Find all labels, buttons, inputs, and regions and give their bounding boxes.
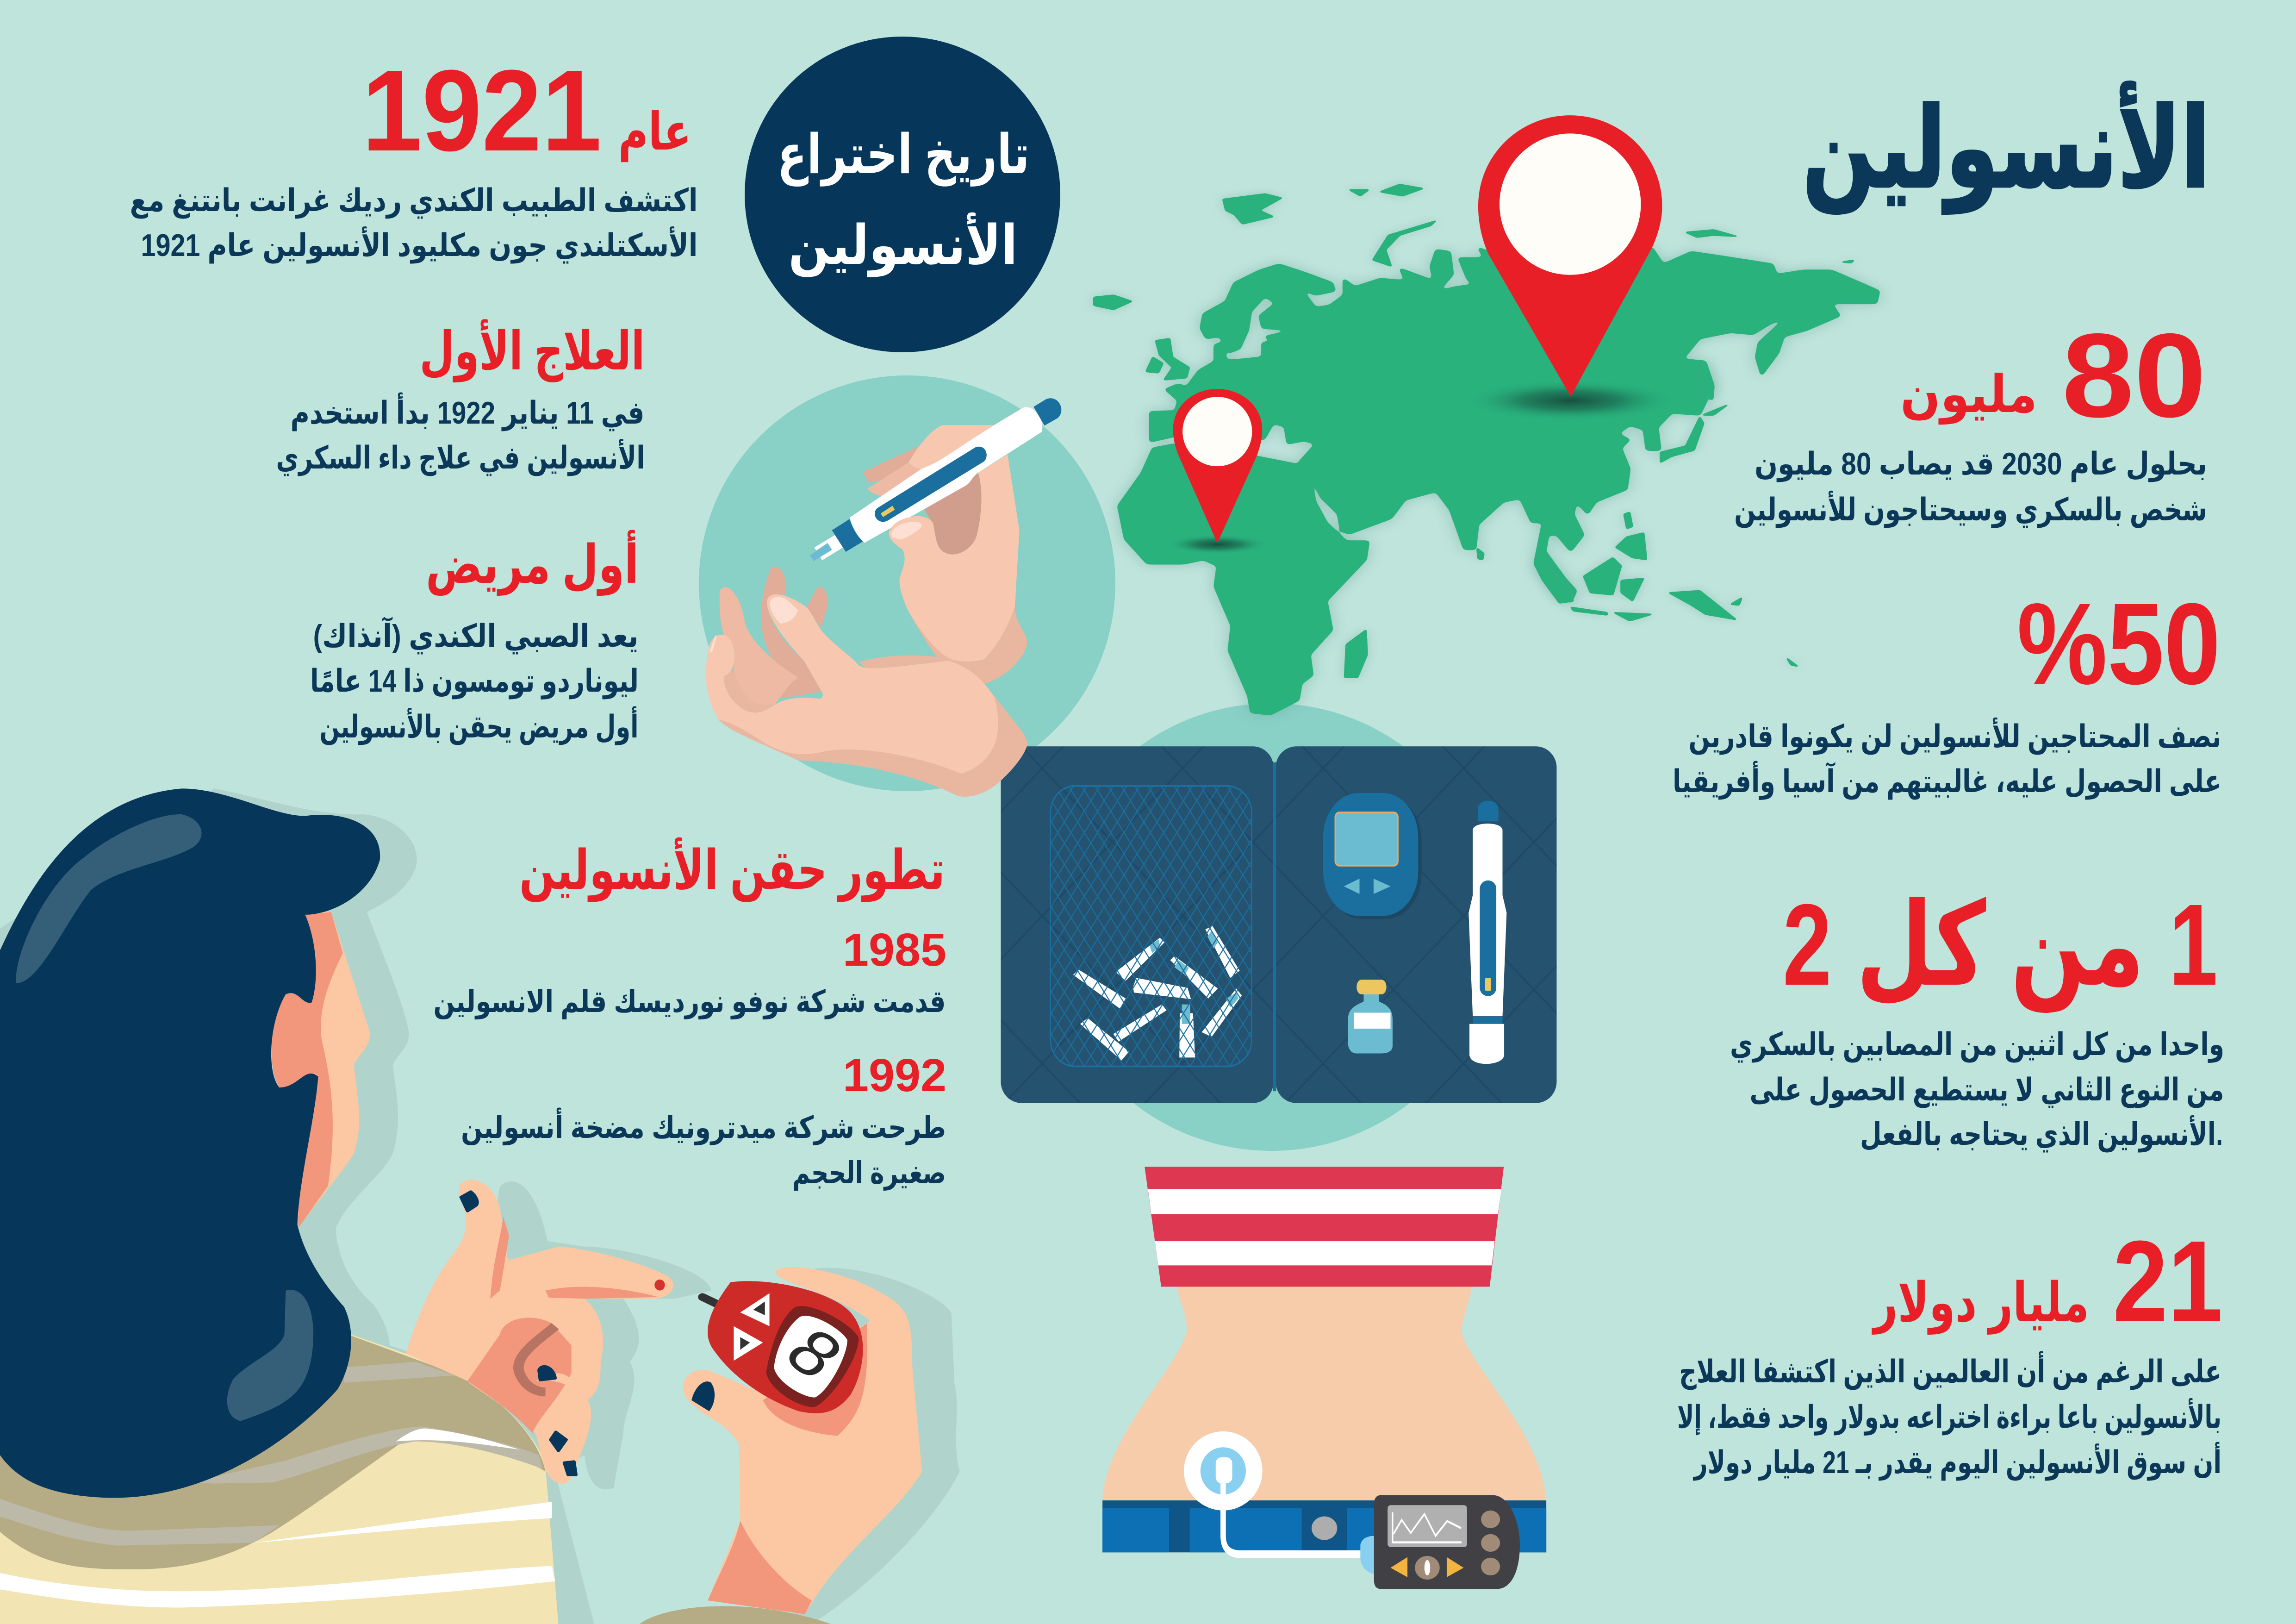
left hand pricking finger [406,1180,673,1484]
lower hand palm [706,594,1027,797]
stat heading: 1 من كل 2 [1783,880,2218,1013]
stat description: بحلول عام 2030 قد يصاب 80 مليون [1755,446,2207,482]
year: 1921 [362,46,602,175]
hair highlights [16,814,313,1421]
pin: large location marker [1478,115,1662,396]
upper hand [863,425,1027,684]
year prefix: عام [618,103,691,162]
pin: small location marker [1173,389,1262,543]
stat: 80 million [1734,308,2207,528]
description 1992: طرحت شركة ميدترونيك مضخة أنسولين [461,1107,946,1146]
stat description [1677,1351,2221,1481]
hand shadows [467,1181,711,1489]
stat: 1 in 2 [1730,880,2224,1153]
belt [1102,1500,1546,1552]
stat: 21 billion dollars [1677,1217,2223,1481]
year 1992: 1992 [843,1049,946,1101]
illustration: woman testing blood sugar [0,788,960,1624]
description 1992 [461,1107,946,1191]
case left panel [1001,746,1274,1103]
meter reading: 8 [771,1315,858,1392]
badge text [778,124,1029,277]
shirt [0,1334,559,1624]
illustration: world map with location pins [1094,115,1879,715]
stat unit: مليون [1900,365,2037,425]
year 1985: 1985 [843,924,946,976]
stat number: %50 [2017,579,2221,708]
insulin vial [1348,980,1393,1054]
illustration: diabetes kit case [1001,703,1556,1151]
timeline: 1921 [130,46,698,264]
description 1992: صغيرة الحجم [792,1156,946,1191]
spine [1273,762,1276,1091]
skin torso [1102,1287,1545,1500]
right hand holding meter [683,1267,922,1614]
stat number: 21 [2113,1217,2223,1346]
face [272,912,370,1227]
mesh pocket [1051,786,1251,1067]
stat unit: مليار دولار [1872,1272,2089,1335]
insulin pump [1360,1495,1520,1589]
lower hand: back fingers [720,567,949,712]
case right panel [1276,746,1556,1103]
description [276,392,645,476]
stat: 50 percent [1673,579,2221,800]
stat description [1734,446,2207,528]
description [310,616,639,745]
striped shirt [1145,1167,1504,1287]
circle backdrop [1048,703,1495,1151]
badge text: تاريخ اختراع [778,124,1029,187]
description: الأسكتلندي جون مكليود الأنسولين عام 1921 [141,226,698,264]
section: evolution of insulin injection [433,837,946,1191]
pin shadow: small [1166,535,1269,554]
stat description [1673,717,2221,800]
description: أول مريض يحقن بالأنسولين [319,706,639,745]
heading: أول مريض [426,530,639,596]
circle backdrop behind hands [699,375,1115,791]
blood glucose meter [703,1281,863,1413]
pin shadow: large [1464,380,1677,421]
description: في 11 يناير 1922 بدأ استخدم [291,392,644,431]
description: يعد الصبي الكندي (آنذاك) [313,616,639,655]
badge: history of insulin invention [745,37,1060,352]
stat description [1730,1027,2224,1153]
quilted texture [1001,746,1556,1103]
illustration: hands holding lancet pen [706,398,1061,797]
lancet pen upright [1468,801,1506,1064]
woman shadow [0,788,594,1624]
section: first patient [310,530,639,745]
badge circle [745,37,1060,352]
section: first treatment [276,319,645,476]
sleeve [640,1606,831,1624]
description: الأنسولين في علاج داء السكري [276,438,645,476]
glucose meter [1323,793,1421,919]
heading: العلاج الأول [419,319,645,383]
map: island groups [1094,184,1854,677]
upper hand thumb [889,517,934,546]
test strips [1073,926,1242,1061]
description [130,183,698,264]
description 1985: قدمت شركة نوفو نورديسك قلم الانسولين [433,984,946,1020]
illustration: torso with insulin pump [1102,1167,1546,1589]
lancet pen [810,398,1061,561]
description: اكتشف الطبيب الكندي رديك غرانت بانتنغ مع [130,183,698,219]
description: ليوناردو تومسون ذا 14 عامًا [310,663,639,700]
infusion patch and tube [1184,1431,1363,1554]
stat number: 80 [2062,308,2206,442]
badge text: الأنسولين [789,212,1017,277]
map: Eurasia and Africa [1118,248,1879,715]
heading: تطور حقن الأنسولين [519,837,945,902]
hair [0,788,380,1498]
